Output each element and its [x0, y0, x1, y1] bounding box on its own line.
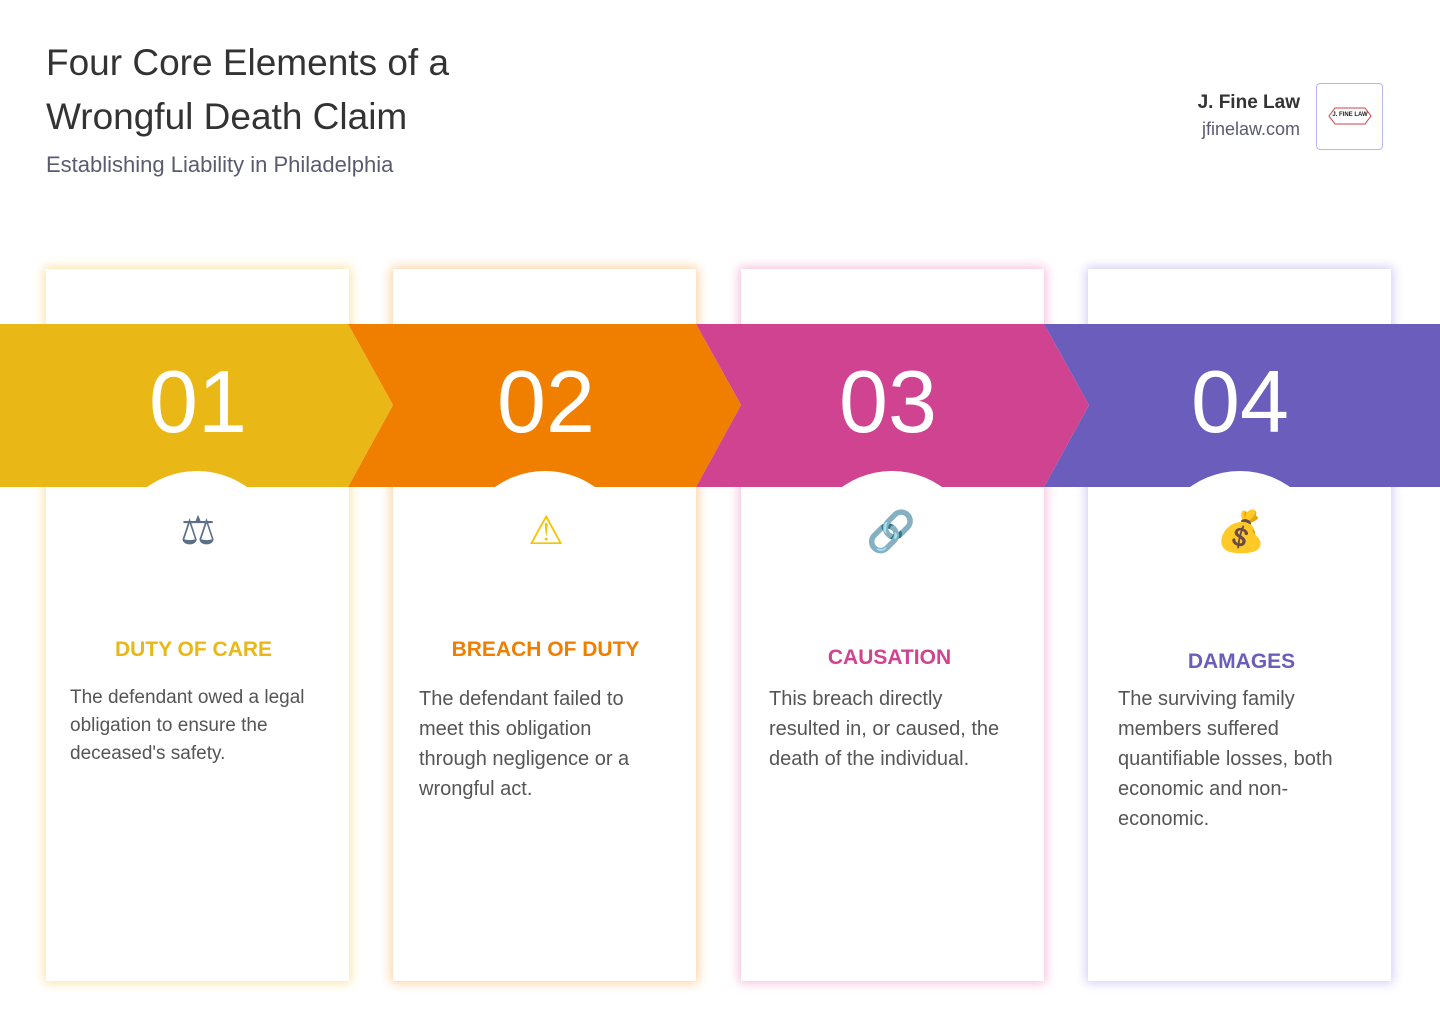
text: quantifiable losses, both: [1118, 748, 1333, 770]
text: meet this obligation: [419, 718, 591, 740]
text: The defendant failed to: [419, 688, 624, 710]
text: resulted in, or caused, the: [769, 718, 999, 740]
brand: [1198, 83, 1383, 150]
text: wrongful act.: [419, 778, 532, 800]
title: Four Core Elements of a: [46, 42, 449, 83]
panel 3 text: CAUSATION: [828, 646, 951, 669]
title: [46, 42, 450, 137]
text: economic and non-: [1118, 778, 1288, 800]
text: 03: [839, 352, 937, 451]
text: deceased's safety.: [70, 743, 225, 764]
text: 💰: [1216, 509, 1266, 555]
brand: J. Fine Law: [1198, 92, 1300, 113]
panel 2 text: BREACH OF DUTY: [452, 638, 639, 661]
text: members suffered: [1118, 718, 1279, 740]
logo: [1316, 83, 1383, 150]
text: This breach directly: [769, 688, 942, 710]
text: 04: [1191, 352, 1289, 451]
text: death of the individual.: [769, 748, 969, 770]
text: The surviving family: [1118, 688, 1295, 710]
text: through negligence or a: [419, 748, 629, 770]
icons: ⚖: [180, 508, 216, 554]
panel 4 text: DAMAGES: [1188, 650, 1295, 673]
subtitle: Establishing Liability in Philadelphia: [46, 152, 393, 177]
brand: jfinelaw.com: [1202, 119, 1300, 139]
text: The defendant owed a legal: [70, 687, 305, 708]
numbers: 01: [149, 352, 247, 451]
banner arrows: [0, 324, 1440, 487]
text: 02: [497, 352, 595, 451]
card shadows & cards: [46, 269, 349, 981]
text: 🔗: [866, 509, 916, 555]
logo: J. FINE LAW: [1332, 112, 1368, 118]
panel 1 text: DUTY OF CARE: [115, 638, 272, 661]
text: economic.: [1118, 808, 1209, 830]
title: Wrongful Death Claim: [46, 96, 407, 137]
text: obligation to ensure the: [70, 715, 268, 736]
text: ⚠: [528, 508, 564, 554]
